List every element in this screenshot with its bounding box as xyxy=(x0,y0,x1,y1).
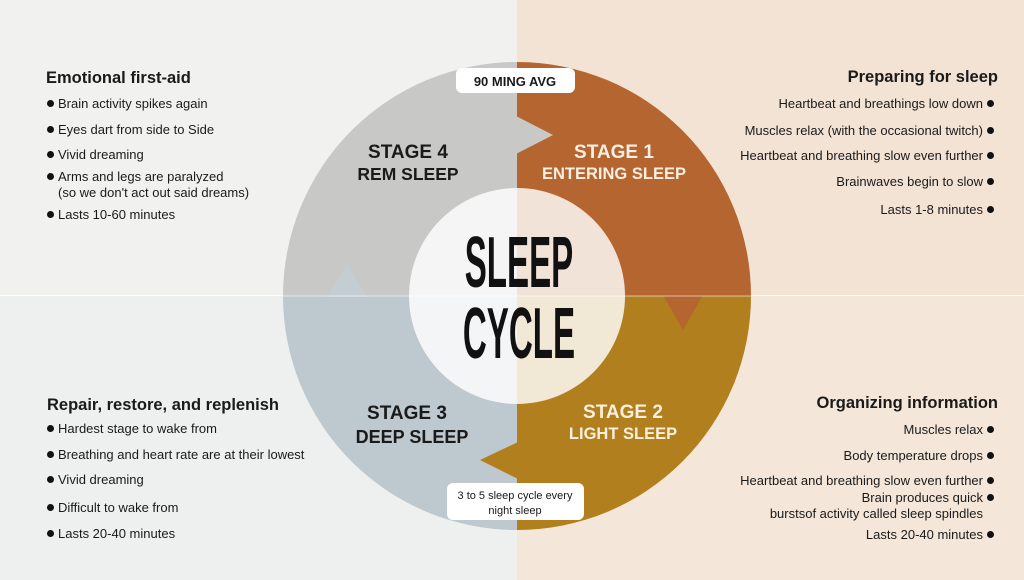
label: stage 3: DEEP SLEEP xyxy=(356,427,468,447)
title: sleep cycle: SLEEP xyxy=(465,221,573,302)
panel: emotional first-aid: Brain activity spikes again xyxy=(58,96,208,111)
label: stage 2: LIGHT SLEEP xyxy=(569,425,677,443)
panel: emotional first-aid: Arms and legs are paralyzed xyxy=(58,169,223,184)
title: sleep cycle: CYCLE xyxy=(463,292,575,373)
arrow: stage 3 to 4 xyxy=(327,264,367,297)
segment: stage 2 xyxy=(517,296,751,530)
panel: emotional first-aid: Lasts 10-60 minutes xyxy=(58,207,175,222)
label: stage 3 xyxy=(356,403,468,447)
panel: organizing information: Lasts 20-40 minutes xyxy=(866,527,983,542)
heading: Repair, restore, and replenish xyxy=(47,396,279,414)
arrow: stage 1 to 2 xyxy=(663,295,703,330)
panel: preparing for sleep: Heartbeat and breathings low down xyxy=(778,96,983,111)
panel: organizing information: Muscles relax xyxy=(904,422,983,437)
label: stage 1: ENTERING SLEEP xyxy=(542,165,686,183)
panel: organizing information xyxy=(740,394,998,542)
panel: emotional first-aid: Eyes dart from side to Side xyxy=(58,122,214,137)
heading: Preparing for sleep xyxy=(848,68,998,86)
label: stage 1 xyxy=(542,142,686,183)
arrow: stage 4 to 1 xyxy=(516,116,553,154)
label: stage 4: STAGE 4 xyxy=(368,142,448,163)
segment: stage 1 xyxy=(517,62,751,296)
panel: preparing for sleep: Brainwaves begin to slow xyxy=(836,174,983,189)
panel: repair, restore, replenish: Vivid dreaming xyxy=(58,472,144,487)
panel: emotional first-aid xyxy=(46,69,249,222)
badge: cycles per night xyxy=(447,483,584,520)
panel: repair, restore, replenish: Lasts 20-40 minutes xyxy=(58,526,175,541)
badge: cycles per night: night sleep xyxy=(488,505,542,517)
label: stage 1: STAGE 1 xyxy=(574,142,654,163)
heading: Organizing information xyxy=(816,394,998,412)
segment: stage 3 xyxy=(283,296,517,530)
label: stage 3: STAGE 3 xyxy=(367,403,447,424)
badge: 90 min avg: 90 MING AVG xyxy=(474,74,556,89)
panel: repair, restore, replenish: Difficult to wake from xyxy=(58,500,178,515)
label: stage 4 xyxy=(357,142,459,184)
label: stage 2: STAGE 2 xyxy=(583,402,663,423)
panel: organizing information: Body temperature drops xyxy=(844,448,983,463)
panel: emotional first-aid: Vivid dreaming xyxy=(58,147,144,162)
segment: stage 4 xyxy=(283,62,517,296)
badge: cycles per night: 3 to 5 sleep cycle every xyxy=(458,490,573,502)
badge: 90 min avg xyxy=(456,68,575,93)
panel: organizing information: Brain produces quick xyxy=(862,490,983,505)
heading: Emotional first-aid xyxy=(46,69,191,87)
panel: preparing for sleep: Lasts 1-8 minutes xyxy=(880,202,983,217)
panel: repair, restore, replenish: Breathing and heart rate are at their lowest xyxy=(58,447,304,462)
label: stage 2 xyxy=(569,402,677,443)
panel: organizing information: burstsof activity called sleep spindles xyxy=(770,506,983,521)
center circle xyxy=(409,188,625,404)
panel: repair, restore, replenish xyxy=(47,396,304,541)
panel: organizing information: Heartbeat and breathing slow even further xyxy=(740,473,983,488)
panel: preparing for sleep: Muscles relax (with the occasional twitch) xyxy=(745,123,983,138)
panel: preparing for sleep xyxy=(740,68,998,217)
panel: emotional first-aid: (so we don't act out said dreams) xyxy=(58,185,249,200)
panel: repair, restore, replenish: Hardest stage to wake from xyxy=(58,421,217,436)
arrow: stage 2 to 3 xyxy=(480,442,518,479)
panel: preparing for sleep: Heartbeat and breathing slow even further xyxy=(740,148,983,163)
label: stage 4: REM SLEEP xyxy=(357,164,459,184)
title: sleep cycle xyxy=(463,221,575,373)
